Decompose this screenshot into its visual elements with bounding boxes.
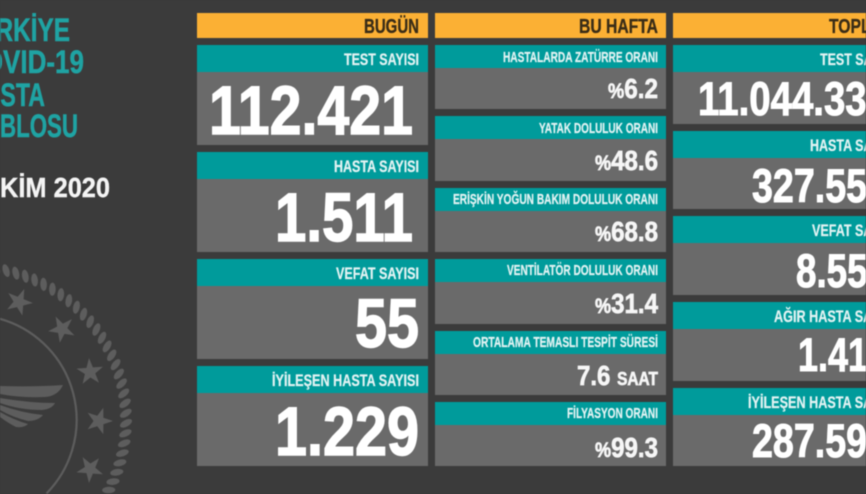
card: test sayısı: 112.421 xyxy=(209,72,413,149)
panel: bu hafta column xyxy=(435,13,666,466)
card: toplam vefat sayısı xyxy=(673,216,866,297)
heading: bu hafta: BU HAFTA xyxy=(579,16,658,38)
card: yatak doluluk oranı: YATAK DOLULUK ORANI xyxy=(539,120,658,137)
card: yoğun bakım doluluk oranı xyxy=(435,188,666,252)
seal rope border xyxy=(0,261,133,494)
card: test sayısı: TEST SAYISI xyxy=(344,50,419,69)
card: ventilatör doluluk oranı: VENTİLATÖR DOLULUK ORANI xyxy=(507,262,658,279)
card: ventilatör doluluk oranı: %31.4 xyxy=(595,288,658,319)
card: vefat sayısı: VEFAT SAYISI xyxy=(336,264,419,283)
card: zatürre oranı xyxy=(435,45,666,109)
card: filyasyon oranı xyxy=(435,402,666,466)
seal inner ring xyxy=(0,319,77,494)
heading: toplam xyxy=(673,13,866,38)
card: yoğun bakım doluluk oranı: %68.8 xyxy=(595,216,658,247)
card: vefat sayısı xyxy=(197,259,428,362)
card: vefat sayısı: 55 xyxy=(355,285,419,362)
card: ağır hasta sayısı xyxy=(673,302,866,381)
card: iyileşen hasta sayısı: İYİLEŞEN HASTA SAYISI xyxy=(272,371,419,390)
title xyxy=(0,12,84,144)
card: ventilatör doluluk oranı xyxy=(435,259,666,324)
card: hasta sayısı xyxy=(197,152,428,256)
card: temaslı tespit süresi: 7.6 SAAT xyxy=(577,360,658,391)
card: temaslı tespit süresi: ORTALAMA TEMASLI TESPİT SÜRESİ xyxy=(473,334,658,351)
card: temaslı tespit süresi xyxy=(435,331,666,395)
card: toplam hasta sayısı xyxy=(673,131,866,212)
seal eagle wing xyxy=(0,385,63,427)
card: hasta sayısı: HASTA SAYISI xyxy=(334,157,419,176)
card: zatürre oranı: %6.2 xyxy=(608,73,658,104)
heading: bugün: BUGÜN xyxy=(364,15,419,38)
card: test sayısı xyxy=(197,45,428,149)
card: toplam iyileşen hasta sayısı xyxy=(673,388,866,467)
heading: bugün xyxy=(197,13,428,38)
card: hasta sayısı: 1.511 xyxy=(275,179,413,256)
card: zatürre oranı: HASTALARDA ZATÜRRE ORANI xyxy=(503,49,658,66)
icon: ministry seal watermark xyxy=(0,261,133,494)
card: filyasyon oranı: FİLYASYON ORANI xyxy=(567,405,658,422)
card: yatak doluluk oranı: %48.6 xyxy=(595,145,658,176)
heading: bu hafta xyxy=(435,13,666,38)
card: yoğun bakım doluluk oranı: ERİŞKİN YOĞUN BAKIM DOLULUK ORANI xyxy=(453,190,658,208)
seal stars xyxy=(2,284,113,487)
panel: bugün column xyxy=(197,13,428,470)
card: yatak doluluk oranı xyxy=(435,116,666,181)
card: iyileşen hasta sayısı xyxy=(197,366,428,470)
card: iyileşen hasta sayısı: 1.229 xyxy=(275,393,419,470)
card: toplam test sayısı xyxy=(673,45,866,125)
panel: toplam column xyxy=(673,13,866,467)
card: filyasyon oranı: %99.3 xyxy=(595,432,658,463)
